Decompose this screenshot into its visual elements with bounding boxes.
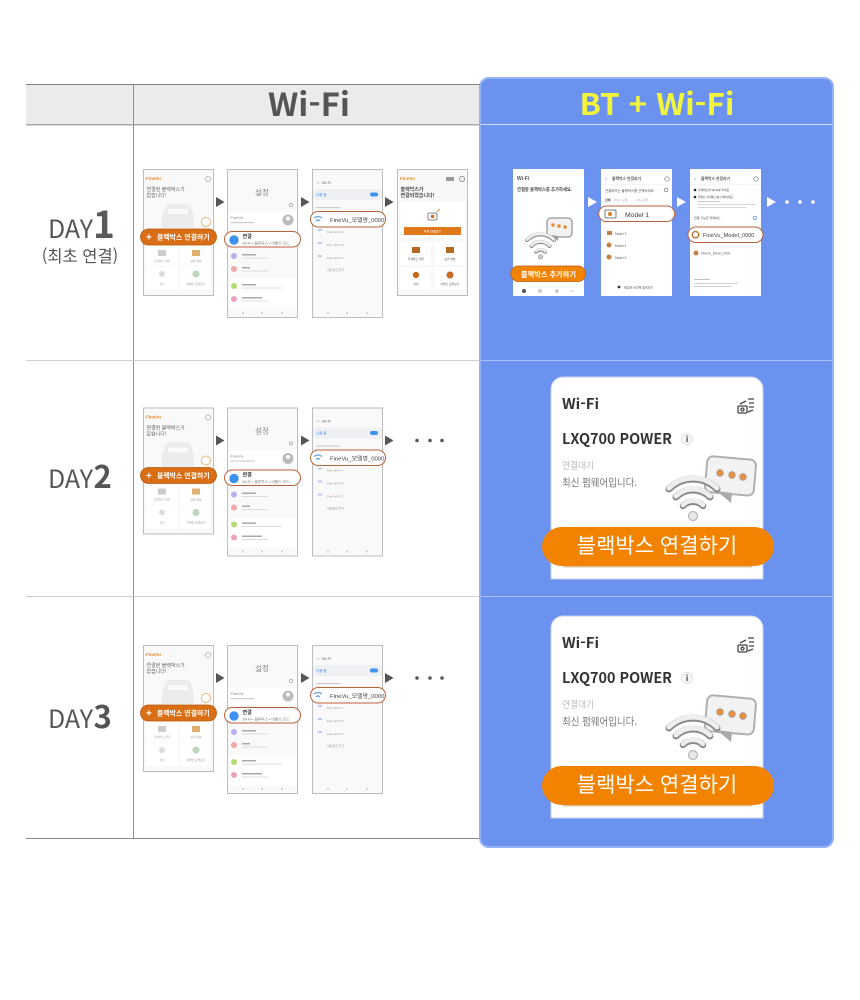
phone: model selection: Model 5 — [615, 256, 627, 260]
phone: model selection: 전체 — [605, 197, 611, 202]
phone: app home, no dashcam connected: 블랙박스 파일 — [154, 498, 171, 502]
phone: Wi-Fi list: Wi-Fi — [322, 181, 331, 185]
phone: settings, connections: 설정 — [255, 426, 269, 436]
phone: app home, no dashcam connected: 블랙박스 연결하기 — [157, 232, 210, 242]
phone: dashcam selection: 연결 가능한 블랙박스 — [694, 215, 721, 220]
arrow — [677, 197, 686, 207]
card: day 2 instant connect widget: 연결대기 — [562, 458, 594, 472]
phone: dashcam selection: 블랙박스의 Wi-Fi를 켜세요. — [698, 188, 730, 192]
icon: camera list — [738, 399, 754, 413]
phone: app home, no dashcam connected: 설정 — [159, 282, 165, 286]
button: connect dashcam, day 3 — [542, 766, 774, 806]
phone: connected home: FineVu — [400, 176, 415, 181]
Wi-Fi steps: day 1 — [140, 170, 468, 318]
phone: app home, no dashcam connected: FineVu — [146, 414, 161, 420]
phone: connected home: 주위 연결보기 — [424, 228, 441, 234]
Wi-Fi steps: day 2 — [140, 408, 444, 556]
phone: Wi-Fi list: Fine Wi-Fi A — [327, 468, 343, 472]
phone: Wi-Fi list: 사용 중 — [316, 668, 327, 673]
phone: Wi-Fi list — [310, 408, 386, 556]
phone: settings, connections: Wi-Fi • 블루투스 • 비행기 모드 — [242, 716, 290, 722]
phone: model selection: Model 1 — [625, 212, 649, 219]
phone: app home, no dashcam connected: 없습니다! — [146, 430, 166, 438]
phone: Wi-Fi list: FineVu_모델명_0000 — [330, 216, 385, 224]
phone: settings, connections: Wi-Fi • 블루투스 • 비행기 모드 — [242, 240, 290, 246]
icon: info — [682, 434, 692, 444]
arrow — [301, 197, 310, 207]
phone: app home, no dashcam connected: 이벤트 요약보기 — [187, 520, 206, 524]
card: day 3 instant connect widget: 연결대기 — [562, 697, 594, 711]
card: day 2 instant connect widget: 최신 펌웨어입니다. — [562, 475, 637, 490]
phone: settings, connections: FineVu — [230, 215, 243, 220]
phone: settings, connections: 연결 — [242, 233, 252, 240]
icon: info — [682, 672, 692, 684]
phone: settings, connections: 설정 — [255, 663, 269, 673]
phone: Wi-Fi list: 네트워크 추가 — [327, 506, 345, 510]
phone: connected home: 설정 — [413, 282, 419, 286]
phone: settings, connections: Wi-Fi • 블루투스 • 비행기 모드 — [242, 479, 290, 484]
phone: settings, connections: 설정 — [255, 187, 269, 197]
phone: app home, no dashcam connected — [140, 408, 216, 534]
phone: Wi-Fi list: FineVu_모델명_0000 — [330, 692, 385, 700]
phone: app home, no dashcam connected: + — [146, 232, 152, 244]
phone: Wi-Fi list — [310, 646, 386, 794]
phone: Wi-Fi list: Fine Wi-Fi C — [327, 494, 344, 498]
phone: dashcam selection: FineVu_Model_0000 — [703, 233, 754, 239]
phone: app home, no dashcam connected: + — [146, 471, 152, 482]
icon: 3D wifi and chat bubble — [669, 456, 756, 520]
phone: app home, no dashcam connected — [140, 170, 216, 296]
phone: settings, connections: 연결 — [242, 709, 252, 716]
phone: app home, no dashcam connected: + — [146, 708, 152, 720]
arrow — [301, 673, 310, 683]
row label: DAY 3 — [48, 692, 112, 737]
phone: Wi-Fi list: 사용 중 — [316, 430, 327, 436]
arrow — [216, 673, 224, 683]
phone: settings, connections — [224, 408, 300, 556]
phone: connected home: 연결되었습니다! — [400, 192, 435, 199]
phone: app home, no dashcam connected: 연결된 블랙박스가 — [146, 662, 185, 669]
phone: Wi-Fi list: Fine Wi-Fi B — [327, 719, 344, 723]
card: day 3 instant connect widget — [551, 616, 763, 818]
phone: app home, no dashcam connected: 연결된 블랙박스가 — [146, 186, 185, 193]
phone: connected home: 블랙박스 파일 — [408, 257, 425, 261]
icon: camera list — [738, 638, 754, 652]
phone: app home, no dashcam connected: 블랙박스 파일 — [154, 735, 171, 739]
phone: Wi-Fi list: < — [317, 418, 320, 424]
phone: app home, no dashcam connected: 보관 영상 — [190, 259, 202, 263]
arrow — [216, 436, 224, 446]
phone: add dashcam: Wi-Fi — [517, 176, 530, 182]
panel: BT + Wi-Fi column — [480, 78, 833, 847]
phone: Wi-Fi list: Wi-Fi — [322, 657, 331, 661]
phone: Wi-Fi list: 네트워크 추가 — [327, 743, 345, 748]
button: connect dashcam, day 2 — [542, 527, 774, 568]
row label: DAY 1 first connection — [42, 195, 118, 267]
phone: connected home: 이벤트 요약보기 — [441, 282, 460, 286]
phone: settings, connections — [224, 170, 300, 318]
card: day 3 instant connect widget: Wi-Fi — [562, 632, 599, 653]
card: day 2 instant connect widget: Wi-Fi — [562, 393, 599, 414]
phone: model selection: < — [605, 176, 608, 181]
phone: Wi-Fi list: Fine Wi-Fi A — [327, 706, 343, 710]
arrow and continuation dots — [385, 436, 444, 446]
row label: DAY 2: DAY — [48, 460, 94, 496]
column heading: BT + Wi-Fi: BT + Wi-Fi — [580, 80, 734, 124]
phone: settings, connections: FineVu — [230, 691, 243, 696]
phone: Wi-Fi list: Wi-Fi — [322, 420, 331, 424]
phone: app home, no dashcam connected: FineVu — [146, 176, 161, 181]
arrow and continuation dots — [767, 197, 815, 207]
phone: settings, connections: 연결 — [242, 472, 252, 478]
BT + Wi-Fi steps: day 1 — [511, 169, 815, 296]
table header band — [26, 84, 480, 126]
phone: Wi-Fi list: Fine Wi-Fi B — [327, 482, 344, 486]
button: connect dashcam, day 2: 블랙박스 연결하기 — [577, 530, 737, 560]
phone: Wi-Fi list: 사용 중 — [316, 192, 327, 197]
Wi-Fi steps: day 3 — [140, 646, 444, 794]
phone: Wi-Fi list — [310, 170, 386, 318]
arrow — [301, 436, 310, 446]
phone: app home, no dashcam connected: 없습니다! — [146, 668, 166, 675]
phone: model selection: Wi-Fi 모델 — [614, 197, 628, 202]
row label: DAY 3: DAY — [48, 700, 94, 736]
phone: app home, no dashcam connected: 이벤트 요약보기 — [187, 758, 206, 762]
phone: connected home — [398, 170, 468, 296]
card: day 3 instant connect widget: 최신 펌웨어입니다. — [562, 714, 637, 729]
phone: Wi-Fi list: Fine Wi-Fi B — [327, 243, 344, 247]
phone: app home, no dashcam connected: 이벤트 요약보기 — [187, 282, 206, 286]
phone: app home, no dashcam connected: 연결된 블랙박스가 — [146, 424, 185, 432]
arrow — [588, 197, 597, 207]
phone: connected home: 보관 영상 — [444, 257, 456, 261]
phone: Wi-Fi list: Fine Wi-Fi C — [327, 256, 344, 260]
phone: model selection: Model 4 — [615, 244, 627, 248]
phone: settings, connections — [224, 646, 300, 794]
button: connect dashcam, day 3: 블랙박스 연결하기 — [577, 769, 737, 799]
phone: app home, no dashcam connected: 블랙박스 연결하기 — [157, 471, 210, 480]
card: day 2 instant connect widget — [551, 377, 763, 579]
phone: model selection — [599, 169, 675, 296]
phone: dashcam selection — [688, 169, 763, 296]
phone: add dashcam: 연결할 블랙박스를 추가하세요. — [517, 186, 572, 193]
phone: model selection: 연결하려는 블랙박스를 선택하세요. — [605, 188, 655, 193]
phone: app home, no dashcam connected: 설정 — [159, 520, 165, 524]
phone: add dashcam: 블랙박스 추가하기 — [521, 270, 576, 279]
phone: dashcam selection: < — [694, 176, 697, 181]
phone: Wi-Fi list: < — [317, 656, 320, 661]
phone: app home, no dashcam connected: 설정 — [159, 758, 165, 762]
row label: DAY 1 first connection: DAY — [48, 210, 94, 246]
card: day 3 instant connect widget: LXQ700 POWER — [562, 667, 672, 688]
phone: model selection: 블랙박스 연결하기 — [612, 176, 642, 181]
phone: model selection: 제휴회사/단체 접속하기 — [624, 284, 654, 290]
phone: app home, no dashcam connected: 보관 영상 — [190, 498, 202, 502]
phone: dashcam selection: 블랙박스 연결하기 — [701, 176, 731, 181]
row label: DAY 2 — [48, 452, 112, 497]
card: day 2 instant connect widget: LXQ700 POWER — [562, 428, 672, 449]
phone: Wi-Fi list: Fine Wi-Fi A — [327, 230, 343, 234]
phone: model selection: Model 3 — [615, 232, 627, 236]
row label: DAY 1 first connection: 1 — [93, 195, 115, 249]
phone: Wi-Fi list: Fine Wi-Fi C — [327, 732, 344, 736]
phone: app home, no dashcam connected — [140, 646, 216, 772]
arrow and continuation dots — [385, 673, 444, 683]
phone: add dashcam — [511, 169, 586, 296]
arrow — [216, 197, 224, 207]
icon: 3D wifi and chat bubble — [669, 695, 756, 760]
phone: Wi-Fi list: < — [317, 180, 320, 185]
phone: app home, no dashcam connected: 없습니다! — [146, 192, 166, 199]
phone: Wi-Fi list: 네트워크 추가 — [327, 267, 345, 272]
phone: app home, no dashcam connected: 블랙박스 파일 — [154, 259, 171, 263]
phone: app home, no dashcam connected: FineVu — [146, 652, 161, 657]
row label: DAY 1 first connection: (최초 연결) — [42, 243, 118, 267]
phone: app home, no dashcam connected: 보관 영상 — [190, 735, 202, 739]
phone: model selection: LTE 모델 — [636, 197, 648, 202]
column heading: Wi-Fi: Wi-Fi — [268, 80, 350, 126]
row label: DAY 3: 3 — [94, 692, 112, 737]
phone: dashcam selection: FineVu_Model_0000 — [701, 252, 731, 256]
row label: DAY 2: 2 — [94, 452, 112, 497]
phone: settings, connections: FineVu — [230, 454, 243, 458]
phone: connected home: 블랙박스가 — [400, 186, 424, 193]
phone: Wi-Fi list: FineVu_모델명_0000 — [330, 454, 385, 462]
phone: app home, no dashcam connected: 블랙박스 연결하기 — [157, 708, 210, 718]
phone: dashcam selection: 원하는 블랙박스를 선택하세요. — [698, 195, 734, 199]
arrow — [385, 197, 394, 207]
